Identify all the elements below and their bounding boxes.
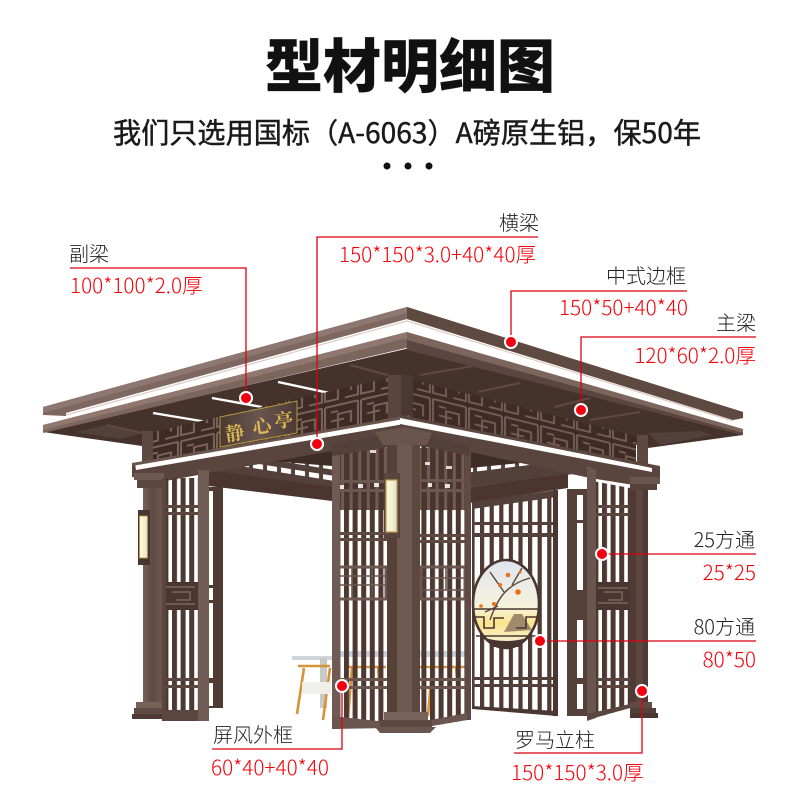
callout: 罗马立柱: 罗马立柱 bbox=[515, 724, 595, 753]
callout: 罗马立柱 bbox=[511, 685, 648, 786]
roof upper band light bbox=[43, 307, 407, 413]
centre column base bbox=[375, 712, 436, 733]
rear lattice left bbox=[209, 436, 332, 490]
title: 型材明细图 bbox=[265, 20, 555, 104]
right rear narrow screen bbox=[567, 489, 587, 716]
callout: 屏风外框 bbox=[211, 680, 348, 781]
wall lamp left bbox=[138, 510, 150, 565]
roof upper band bbox=[43, 307, 743, 420]
rear underside shade right bbox=[470, 440, 590, 468]
roof underside bbox=[43, 348, 743, 448]
underside panels right bbox=[648, 431, 713, 445]
right frieze lattice bbox=[413, 380, 636, 468]
roof lower fascia right shade bbox=[407, 340, 743, 435]
plaque: 心 bbox=[250, 410, 276, 440]
callout: 25方通 bbox=[596, 524, 756, 586]
subtitle: 我们只选用国标（A-6063）A磅原生铝，保50年 bbox=[113, 111, 701, 152]
right roman column bbox=[630, 477, 660, 718]
callout: 副梁: 副梁 bbox=[69, 238, 109, 267]
callout: 中式边框: 150*50+40*40 bbox=[559, 291, 688, 321]
roof lower fascia highlight bbox=[43, 332, 407, 430]
callout: 副梁: 100*100*2.0厚 bbox=[70, 269, 203, 299]
centre column bbox=[387, 445, 420, 718]
rear screen with round window bbox=[472, 490, 558, 716]
front beam right with light strip bbox=[400, 415, 660, 486]
ceiling light strips bbox=[153, 382, 385, 423]
plaque: 静 bbox=[223, 418, 246, 447]
centre right screen bbox=[420, 444, 471, 728]
wall lamp centre bbox=[384, 473, 400, 538]
rear lattice right bbox=[470, 440, 590, 487]
rear underside shade left bbox=[209, 436, 332, 466]
callout: 屏风外框: 60*40+40*40 bbox=[211, 751, 329, 781]
plaque bbox=[220, 401, 297, 447]
callout: 副梁 bbox=[69, 238, 252, 404]
callout: 中式边框: 中式边框 bbox=[606, 260, 686, 289]
left screen bbox=[162, 470, 223, 721]
callout: 罗马立柱: 150*150*3.0厚 bbox=[511, 756, 644, 786]
right screen bbox=[587, 466, 630, 721]
callout: 主梁: 120*60*2.0厚 bbox=[634, 339, 756, 369]
callout: 屏风外框: 屏风外框 bbox=[213, 719, 293, 748]
plaque: 亭 bbox=[272, 405, 295, 434]
centre left screen bbox=[332, 444, 387, 729]
callout: 横梁: 150*150*3.0+40*40厚 bbox=[339, 238, 536, 268]
callout: 80方通 bbox=[534, 611, 756, 673]
front beam left with light strip bbox=[132, 415, 410, 482]
rear beam left bbox=[209, 470, 332, 501]
rear beam right bbox=[470, 474, 568, 503]
round window painting bbox=[473, 560, 539, 648]
left roman column bbox=[132, 473, 164, 719]
pavilion illustration bbox=[43, 307, 743, 733]
roof lower fascia bbox=[43, 332, 743, 435]
frieze posts bbox=[142, 375, 648, 467]
callout: 25方通: 25方通 bbox=[694, 524, 755, 553]
three dots divider bbox=[384, 162, 432, 170]
underside panels left bbox=[75, 425, 142, 439]
callout: 80方通: 80*50 bbox=[703, 643, 756, 673]
roof edge trim bbox=[66, 321, 733, 421]
left frieze lattice bbox=[153, 378, 388, 464]
callout: 中式边框 bbox=[505, 260, 688, 348]
callout: 横梁: 横梁 bbox=[499, 207, 539, 236]
callout: 80方通: 80方通 bbox=[694, 611, 755, 640]
callout: 25方通: 25*25 bbox=[703, 556, 756, 586]
callout: 主梁 bbox=[575, 307, 756, 416]
centre capital bbox=[332, 427, 470, 456]
callout: 主梁: 主梁 bbox=[716, 307, 756, 336]
callout: 横梁 bbox=[311, 207, 539, 450]
roof upper band right shade bbox=[407, 307, 743, 420]
table and chairs bbox=[292, 651, 470, 720]
underside ribs bbox=[107, 365, 640, 433]
